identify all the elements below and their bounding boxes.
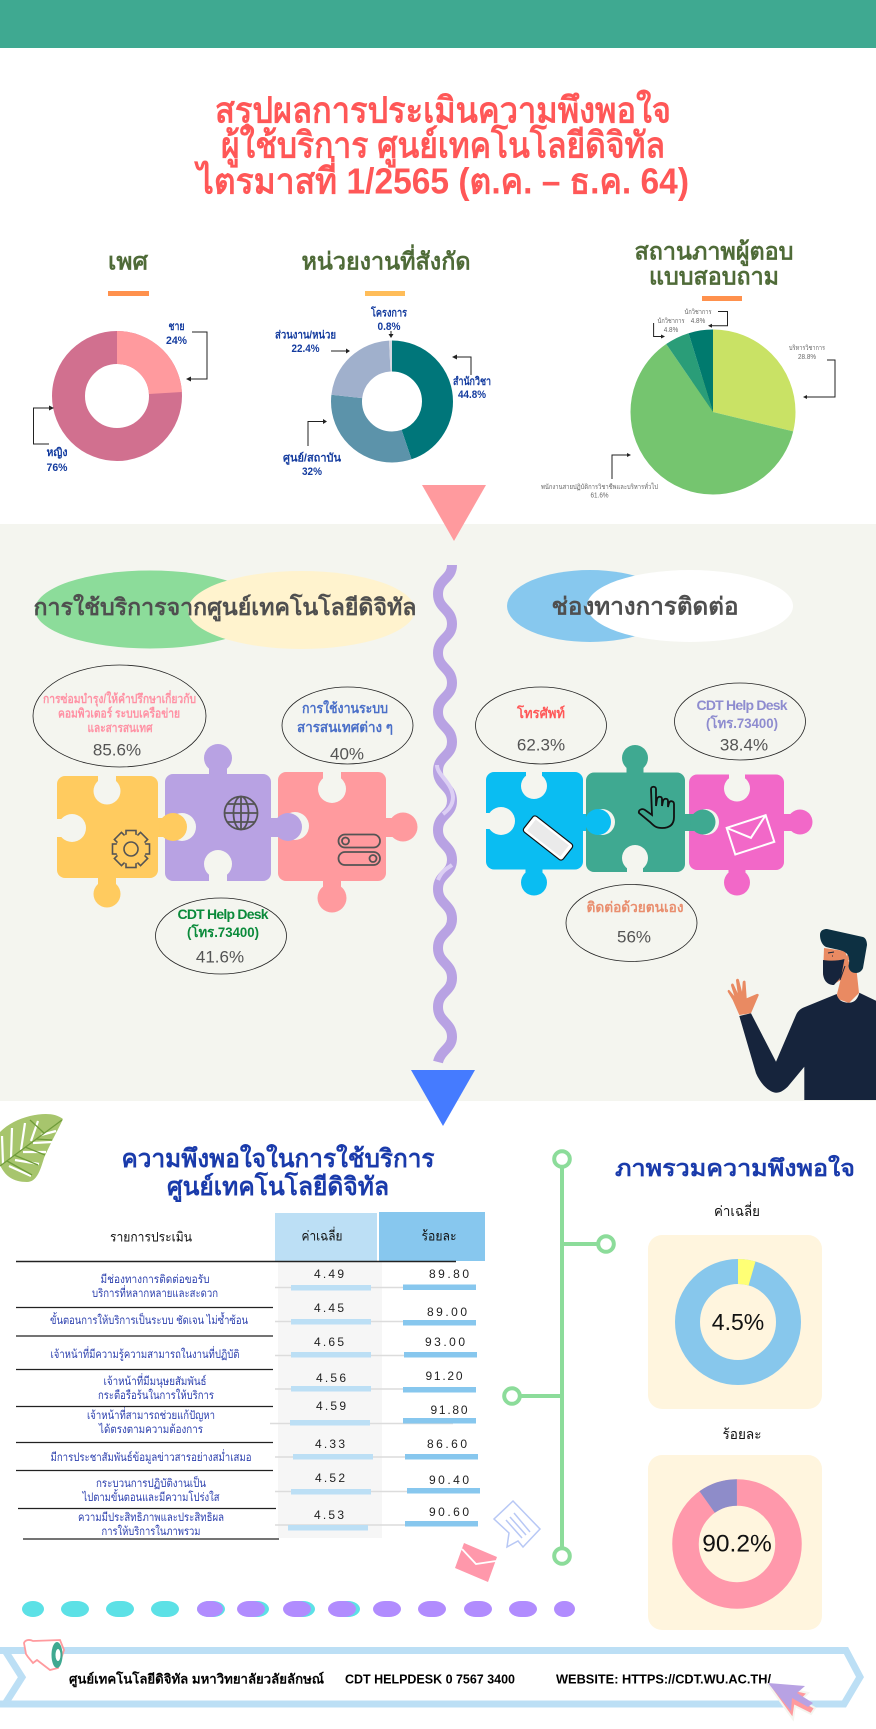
callout: CDT help desk green: CDT Help Desk: [178, 906, 269, 922]
icon: toggles: [338, 834, 380, 865]
row 8: 4.53: [314, 1508, 344, 1522]
row 7: 4.52: [315, 1471, 345, 1485]
row 7: กระบวนการปฏิบัติงานเป็น: [96, 1475, 206, 1490]
label: academics: นักวิชาการ: [684, 308, 712, 316]
label: schools: [452, 354, 491, 401]
heading: respondent status: สถานภาพผู้ตอบ: [634, 238, 794, 266]
row 7: 90.40: [429, 1473, 469, 1487]
callout: self service: 56%: [617, 928, 651, 946]
row 3: 93.00: [425, 1335, 465, 1349]
label: schools: 44.8%: [458, 389, 486, 401]
label: projects: โครงการ: [370, 306, 407, 320]
callout: CDT help desk purple: CDT Help Desk: [696, 697, 788, 713]
row 5: [87, 1399, 476, 1436]
row 6: 4.33: [315, 1437, 345, 1451]
heading: satisfaction with services: [122, 1143, 435, 1203]
table header: ร้อยละ: [422, 1228, 456, 1244]
card: percent donut: 90.2%: [702, 1530, 772, 1558]
callout: information systems: [282, 687, 413, 764]
callout: repair and consultation: และสารสนเทศ: [88, 721, 153, 735]
heading: satisfaction with services: ศูนย์เทคโนโลยีดิจิทัล: [167, 1171, 389, 1203]
title: [193, 88, 689, 202]
row 2: ขั้นตอนการให้บริการเป็นระบบ ชัดเจน ไม่ซ้ำซ้อน: [50, 1312, 248, 1327]
label: divisions: ส่วนงาน/หน่วย: [275, 330, 336, 342]
label: schools: สำนักวิชา: [453, 375, 491, 388]
row 4: [98, 1369, 476, 1402]
donut chart: department: [346, 356, 438, 447]
row 2: 89.00: [427, 1305, 467, 1319]
icon: megaphone: [24, 1640, 64, 1670]
table: satisfaction scores: [16, 1212, 485, 1539]
row 1: 89.80: [429, 1267, 469, 1281]
callout: information systems: การใช้งานระบบ: [302, 699, 388, 716]
callout: information systems: สารสนเทศต่าง ๆ: [297, 719, 393, 735]
label: academic administration: 28.8%: [798, 354, 816, 361]
heading accent bar: gender: [108, 291, 149, 296]
callout: repair and consultation: คอมพิวเตอร์ ระบบเครือข่าย: [58, 706, 180, 720]
wavy divider: [437, 565, 453, 1062]
footer ribbon: ศูนย์เทคโนโลยีดิจิทัล มหาวิทยาลัยวลัยลักษณ์: [69, 1670, 324, 1688]
heading: contact channels: [507, 570, 793, 642]
callout: CDT help desk green: [156, 898, 286, 974]
icon: monstera leaf: [0, 1114, 63, 1182]
puzzle piece: blue phone: [483, 769, 598, 896]
label: divisions: 22.4%: [292, 343, 320, 355]
label: centers: ศูนย์/สถาบัน: [283, 452, 341, 466]
heading: gender: เพศ: [108, 248, 149, 276]
heading: respondent status: แบบสอบถาม: [649, 264, 779, 290]
card: average donut: [648, 1235, 822, 1409]
timeline decoration: [504, 1151, 614, 1564]
title: สรุปผลการประเมินความพึงพอใจ: [215, 88, 671, 134]
row 8: ความมีประสิทธิภาพและประสิทธิผล: [78, 1511, 224, 1524]
row 6: มีการประชาสัมพันธ์ข้อมูลข่าวสารอย่างสม่ำเสมอ: [50, 1449, 252, 1464]
row 7: ไปตามขั้นตอนและมีความโปร่งใส: [82, 1489, 219, 1504]
puzzle: services: [54, 744, 418, 912]
label: academics second group: 4.8%: [664, 327, 678, 334]
label: divisions: [275, 330, 350, 355]
card: average donut: 4.5%: [712, 1309, 764, 1335]
row 4: 91.20: [426, 1369, 463, 1383]
icon: phone: [522, 815, 574, 861]
icon: speech bubble: [494, 1501, 540, 1547]
title: ไตรมาสที่ 1/2565 (ต.ค. – ธ.ค. 64): [193, 156, 689, 202]
panel: services and contact channels: [0, 524, 876, 1101]
callout: repair and consultation: [33, 665, 206, 767]
callout: phone: 62.3%: [517, 736, 565, 754]
panel: respondent status: [541, 238, 835, 500]
label: projects: 0.8%: [378, 321, 401, 333]
heading accent bar: respondent status: [702, 296, 742, 301]
panel: department: [275, 244, 491, 478]
callout: repair and consultation: การซ่อมบำรุง/ให้คำปรึกษาเกี่ยวกับ: [43, 690, 196, 707]
icon: pink envelope: [455, 1543, 497, 1582]
label: operations staff: 61.6%: [590, 492, 608, 500]
callout: phone: [476, 687, 606, 764]
row 1: บริการที่หลากหลายและสะดวก: [92, 1285, 218, 1300]
row 1: มีช่องทางการติดต่อขอรับ: [100, 1273, 210, 1286]
label: academic administration: บริหารวิชาการ: [789, 344, 825, 352]
row 3: 4.65: [314, 1335, 344, 1349]
heading: contact channels: ช่องทางการติดต่อ: [552, 594, 738, 620]
row 6: [50, 1437, 478, 1464]
label: average: ค่าเฉลี่ย: [714, 1202, 760, 1219]
row 7: [82, 1471, 480, 1504]
puzzle piece: pink envelope: [682, 772, 812, 896]
arrow: pink triangle: [422, 485, 486, 541]
label: operations staff: พนักงานสายปฏิบัติการวิชาชีพและบริหารทั่วไป: [541, 482, 658, 491]
table header: [110, 1212, 485, 1261]
row 4: กระตือรือร้นในการให้บริการ: [98, 1389, 214, 1402]
label: operations staff: [541, 453, 658, 500]
arrow: blue triangle: [411, 1070, 475, 1126]
label: female: 76%: [46, 462, 68, 474]
callout: self service: ติดต่อด้วยตนเอง: [586, 899, 684, 915]
illustration: man waving: [728, 929, 876, 1100]
puzzle piece: green pointer: [585, 745, 698, 874]
panel: gender: [34, 248, 207, 474]
callout: CDT help desk green: 41.6%: [196, 948, 244, 966]
label: centers: [283, 419, 341, 478]
top header band: [0, 0, 876, 48]
icon: pointer hand: [639, 787, 674, 828]
label: academics second group: นักวิชาการ: [658, 317, 685, 325]
label: projects: [370, 306, 407, 338]
label: academics second group: [654, 317, 685, 338]
row 3: [50, 1335, 477, 1361]
row 6: 86.60: [427, 1437, 467, 1451]
puzzle: contact channels: [483, 745, 812, 896]
row 4: เจ้าหน้าที่มีมนุษยสัมพันธ์: [104, 1373, 206, 1388]
row 8: [78, 1505, 478, 1538]
heading: department: หน่วยงานที่สังกัด: [302, 244, 470, 276]
label: academics: 4.8%: [691, 318, 705, 325]
label: academics: [684, 308, 728, 328]
callout: self service: [566, 884, 697, 962]
label: female: หญิง: [46, 446, 68, 459]
heading: services: [34, 570, 417, 649]
label: centers: 32%: [302, 466, 322, 478]
heading: satisfaction overview: ภาพรวมความพึงพอใจ: [615, 1154, 855, 1181]
row 1: [92, 1267, 476, 1300]
row 1: 4.49: [314, 1267, 344, 1281]
donut chart: gender: [68, 348, 166, 444]
label: academic administration: [789, 344, 835, 399]
heading: respondent status: [634, 238, 794, 290]
heading: satisfaction with services: ความพึงพอใจในการใช้บริการ: [122, 1143, 435, 1173]
footer ribbon: [0, 1650, 860, 1704]
label: female: [34, 406, 68, 474]
card: percent donut: [648, 1455, 822, 1630]
title: ผู้ใช้บริการ ศูนย์เทคโนโลยีดิจิทัล: [221, 124, 665, 168]
heading: services: การใช้บริการจากศูนย์เทคโนโลยีดิจิทัล: [34, 593, 417, 622]
row 2: [50, 1301, 476, 1327]
row 5: 91.80: [430, 1403, 468, 1417]
row 2: 4.45: [314, 1301, 344, 1315]
icon: cursor arrow: [768, 1683, 815, 1719]
callout: CDT help desk purple: [674, 683, 806, 760]
footer ribbon: WEBSITE: HTTPS://CDT.WU.AC.TH/: [556, 1672, 771, 1686]
row 5: 4.59: [316, 1399, 346, 1413]
callout: CDT help desk purple: 38.4%: [720, 736, 768, 754]
puzzle piece: red toggles: [268, 770, 418, 912]
heading accent bar: department: [365, 291, 405, 296]
callout: CDT help desk purple: (โทร.73400): [706, 714, 778, 731]
table header: รายการประเมิน: [110, 1230, 192, 1244]
footer ribbon: CDT HELPDESK 0 7567 3400: [345, 1672, 515, 1686]
label: percent: ร้อยละ: [722, 1426, 762, 1442]
label: male: [166, 321, 207, 382]
icon: gear: [112, 830, 150, 868]
callout: repair and consultation: 85.6%: [93, 740, 141, 760]
row 3: เจ้าหน้าที่มีความรู้ความสามารถในงานที่ปฏิบัติ: [50, 1346, 240, 1361]
icon: envelope: [727, 815, 774, 854]
row 8: 90.60: [429, 1505, 469, 1519]
callout: information systems: 40%: [330, 744, 364, 764]
row 5: ได้ตรงตามความต้องการ: [98, 1423, 203, 1436]
row 4: 4.56: [316, 1371, 346, 1385]
puzzle piece: yellow gear: [54, 772, 187, 908]
row 5: เจ้าหน้าที่สามารถช่วยแก้ปัญหา: [87, 1407, 215, 1422]
dot row: [22, 1601, 575, 1617]
label: male: 24%: [166, 335, 187, 347]
icon: globe: [224, 796, 258, 830]
pie chart: respondent status: [672, 371, 754, 453]
callout: CDT help desk green: (โทร.73400): [187, 923, 259, 940]
callout: phone: โทรศัพท์: [516, 704, 565, 721]
table header: ค่าเฉลี่ย: [302, 1226, 342, 1244]
row 8: การให้บริการในภาพรวม: [102, 1525, 200, 1538]
puzzle piece: purple globe: [159, 744, 288, 883]
label: male: ชาย: [168, 321, 184, 333]
